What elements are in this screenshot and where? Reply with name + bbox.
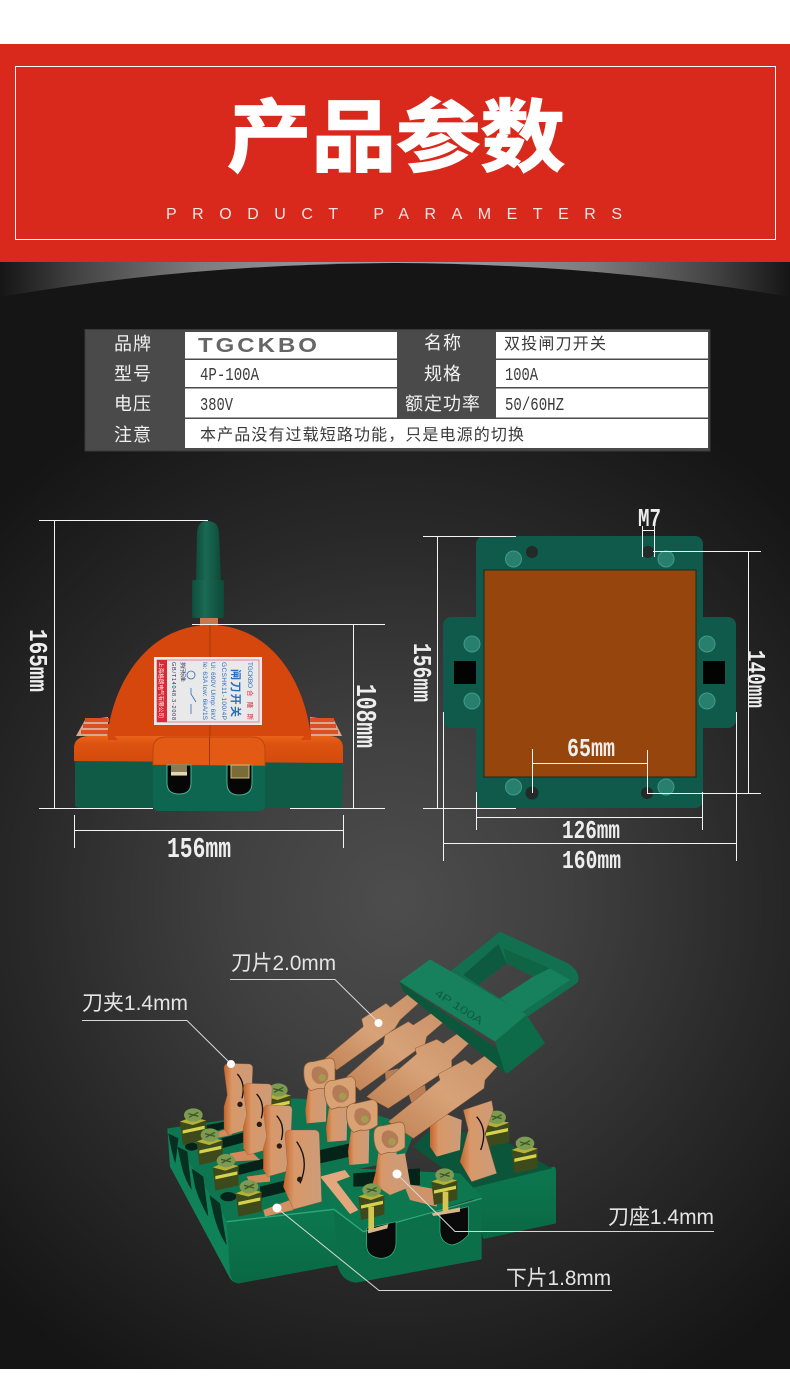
blade 4	[388, 1050, 502, 1138]
terminal slot left	[167, 765, 191, 794]
front view: switch	[74, 521, 343, 811]
dimension label 65mm: 65mm	[567, 734, 615, 764]
title: 产品参数	[227, 93, 565, 182]
center block	[153, 737, 265, 811]
banner: red title panel	[0, 44, 790, 262]
callout: 刀夹1.4mm: 刀夹1.4mm	[82, 992, 188, 1015]
back view dimension lines	[406, 504, 770, 876]
left module front wall	[227, 1209, 338, 1283]
table row labels: 额定功率	[405, 394, 480, 414]
dimension label 140mm: 140mm	[740, 650, 770, 708]
blade 3	[367, 1028, 472, 1108]
right module wall	[470, 1167, 556, 1239]
nameplate sticker: 上海格朗电气有限公司	[157, 662, 165, 718]
center top	[320, 1168, 482, 1232]
nameplate sticker	[154, 657, 262, 725]
table values: TGCKBO	[198, 334, 320, 357]
square holes	[454, 661, 476, 684]
lower copper plates	[213, 1127, 440, 1217]
front terminals	[358, 1168, 460, 1233]
dimension label 156mm side: 156mm	[406, 643, 436, 702]
nameplate sticker: 合隆斯	[246, 690, 255, 720]
callout: 下片1.8mm	[272, 1204, 612, 1290]
table values	[198, 334, 606, 444]
nameplate sticker: Ie: 63A Icw: 6kA/1S	[201, 662, 208, 721]
callout: 刀片2.0mm	[230, 952, 382, 1027]
callout: 刀片2.0mm: 刀片2.0mm	[231, 952, 336, 975]
internal view: open switch illustration	[167, 932, 579, 1283]
grooves on top	[185, 1122, 420, 1201]
parameter table	[85, 330, 710, 451]
left terminals	[180, 1108, 262, 1217]
dimension label 165mm: 165mm	[22, 629, 52, 692]
orange cover	[484, 570, 696, 777]
side wall slots	[168, 1133, 227, 1245]
plate	[476, 536, 703, 808]
subtitle: PRODUCT PARAMETERS	[166, 206, 622, 223]
left side wall	[167, 1128, 240, 1283]
table values: 380V	[200, 396, 233, 416]
nameplate sticker: GCSHK11-100/4P	[220, 662, 227, 720]
dimension label 108mm: 108mm	[348, 684, 381, 748]
callout: 下片1.8mm: 下片1.8mm	[506, 1267, 611, 1290]
decorative arc under banner	[0, 262, 790, 330]
center front wall	[334, 1198, 482, 1283]
blade 2	[347, 1010, 444, 1091]
orange base	[74, 736, 343, 763]
rear clips behind blades	[385, 1068, 427, 1108]
right module top	[413, 1127, 552, 1188]
side tabs	[443, 617, 503, 728]
handle bar: 4P 100A	[432, 987, 486, 1028]
base body	[167, 1098, 556, 1283]
pull handle loop	[450, 932, 579, 1018]
callout: 刀座1.4mm	[392, 1170, 714, 1232]
front slots	[367, 1222, 396, 1258]
handle bar	[399, 959, 545, 1073]
dimension label 160mm: 160mm	[562, 846, 621, 876]
handle	[192, 521, 224, 626]
table values: 100A	[505, 366, 538, 386]
table row labels: 名称	[424, 333, 461, 353]
blade 1	[325, 994, 418, 1070]
table values: 50/60HZ	[505, 396, 564, 416]
table row labels: 电压	[114, 394, 151, 414]
pivot 4	[373, 1153, 411, 1195]
front view dimension lines	[22, 520, 385, 866]
nameplate sticker: 闸刀开关	[229, 669, 243, 717]
table row labels: 规格	[424, 364, 461, 384]
round bosses	[464, 551, 715, 795]
terminal slot right	[227, 765, 252, 795]
nameplate sticker: TGCKBO	[246, 662, 253, 688]
dimension label 126mm: 126mm	[562, 816, 620, 846]
side terminal ribs	[76, 717, 342, 736]
dimension label M7: M7	[638, 504, 661, 534]
dimension label 156mm: 156mm	[167, 833, 231, 866]
orange dome cover	[107, 625, 311, 738]
nameplate sticker: GB/T14048.3-2008	[170, 662, 176, 720]
callout: 刀座1.4mm: 刀座1.4mm	[608, 1206, 714, 1229]
knife blades and pivots	[304, 994, 502, 1195]
green lower body	[75, 761, 343, 808]
nameplate sticker: Ui: 690V Uimp: 6kV	[209, 662, 216, 721]
nameplate sticker: 执行标准:	[179, 662, 187, 682]
right clips and terminals	[430, 1101, 538, 1182]
table row labels: 型号	[114, 364, 151, 384]
left module top surface	[167, 1098, 417, 1222]
table values: 双投闸刀开关	[504, 335, 606, 353]
table values: 4P-100A	[200, 366, 259, 386]
callout: 刀夹1.4mm	[82, 992, 235, 1068]
table row labels	[114, 333, 480, 445]
table row labels: 注意	[114, 425, 151, 445]
table row labels: 品牌	[114, 334, 151, 354]
table values: 本产品没有过载短路功能，只是电源的切换	[200, 426, 524, 444]
table value cells	[185, 332, 708, 448]
mounting holes	[526, 546, 654, 800]
back view: mounting plate	[443, 536, 736, 808]
left blade clips	[224, 1063, 322, 1209]
